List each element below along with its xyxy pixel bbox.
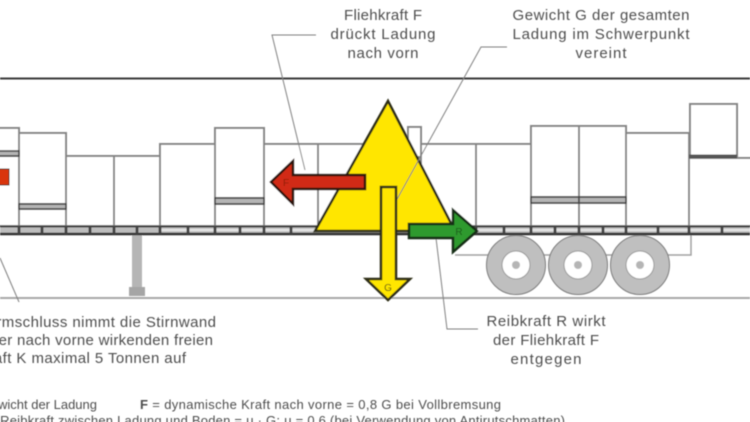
- arrow: Reibkraft R: R: [455, 227, 463, 238]
- trailer chassis: [455, 235, 691, 255]
- label: Reibkraft R: der Fliehkraft F: [493, 332, 599, 349]
- label: Fliehkraft F: drückt Ladung: [330, 26, 436, 43]
- label: Gewicht G: Ladung im Schwerpunkt: [512, 26, 690, 43]
- arrow: Fliehkraft F: [271, 161, 365, 204]
- label: Fliehkraft F: Fliehkraft F: [344, 7, 422, 24]
- centre of gravity load triangle: [315, 101, 455, 231]
- label: Gewicht G: vereint: [576, 45, 627, 62]
- label: Gewicht G: Gewicht G der gesamten: [512, 7, 690, 24]
- arrow: Kraft K: [0, 169, 9, 185]
- leader line: Fliehkraft: [272, 35, 316, 170]
- legend: Kraft F: F = dynamische Kraft nach vorne = 0,8 G bei Vollbremsung: [140, 397, 501, 412]
- arrow: Gewicht G: [366, 187, 410, 300]
- arrow: Reibkraft R: [409, 210, 477, 252]
- leader line: Formschluss: [0, 258, 19, 302]
- leader line: Gewicht: [390, 47, 507, 212]
- label: Reibkraft R: Reibkraft R wirkt: [486, 313, 606, 330]
- arrow: Fliehkraft F: F: [283, 178, 289, 189]
- arrow: Gewicht G: G: [384, 283, 392, 294]
- trailer deck: [0, 226, 750, 235]
- leader line: Reibkraft: [436, 238, 478, 329]
- cargo boxes: [0, 104, 750, 226]
- support leg: [129, 235, 145, 296]
- label: Fliehkraft F: nach vorn: [348, 45, 418, 62]
- wheels: [486, 236, 670, 294]
- label: Reibkraft R: entgegen: [510, 351, 582, 368]
